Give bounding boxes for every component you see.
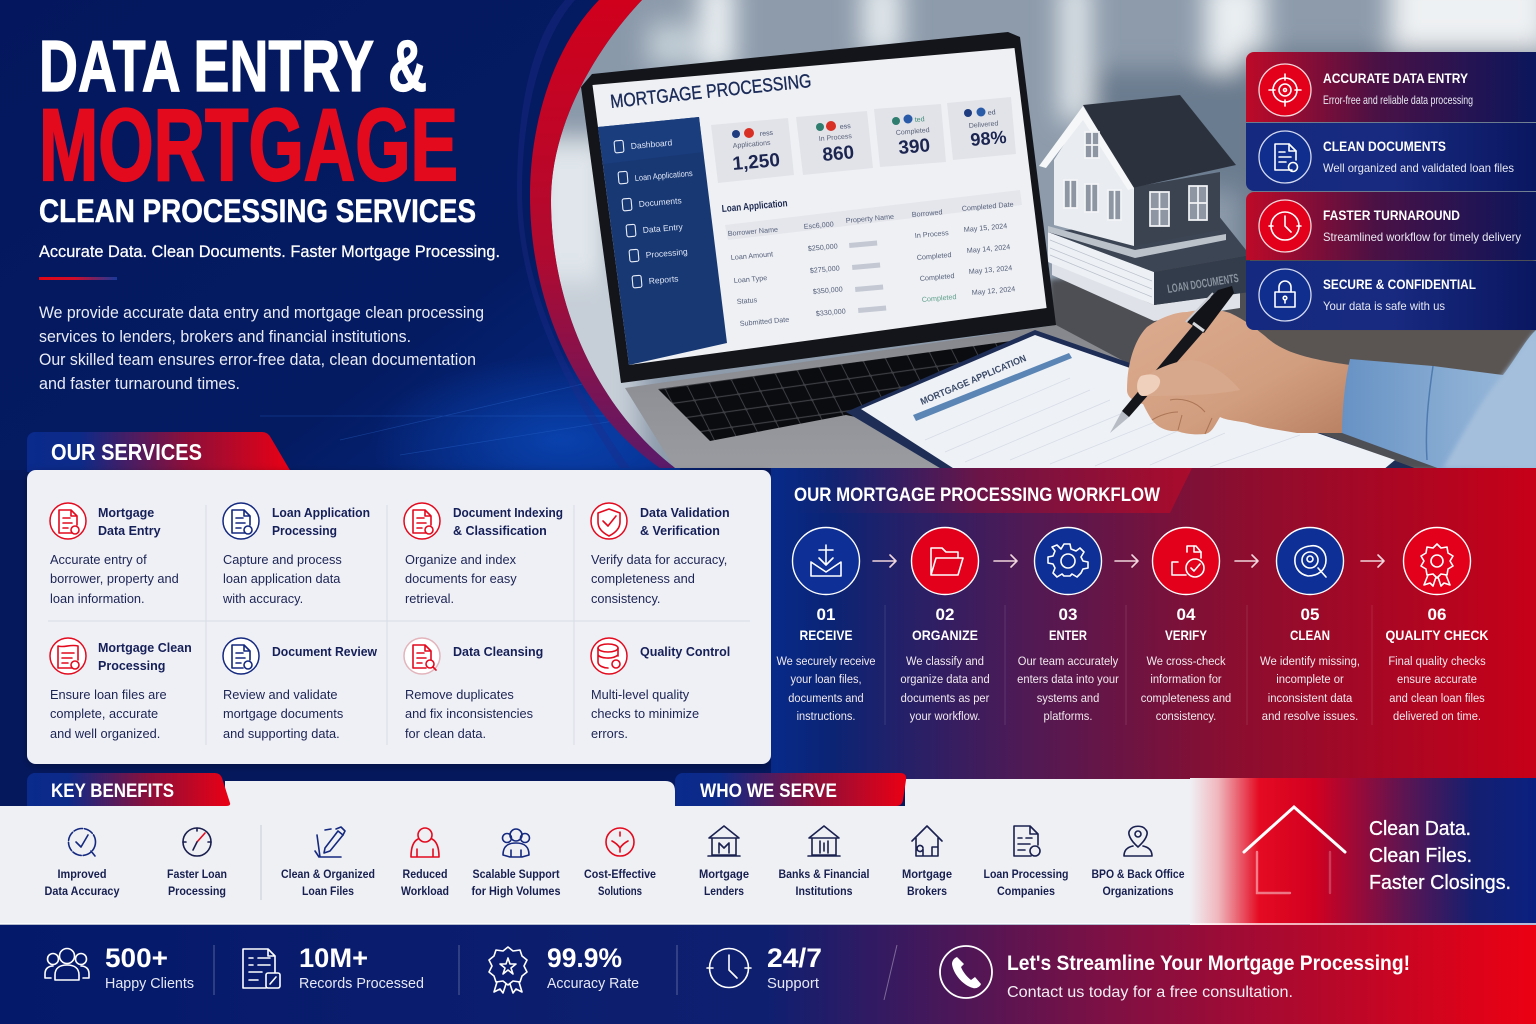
sidebar menu: Dashboard: [630, 137, 673, 151]
light band behind benefits and audience rows: [0, 779, 1200, 924]
step 02 organize: 02: [936, 605, 954, 624]
benefit: scalable support: for High Volumes: [472, 884, 561, 898]
arrow: [873, 555, 896, 567]
stat cards: ed: [988, 109, 996, 117]
banner slogan: Clean Data.: [1369, 818, 1471, 840]
key benefits heading tab: [27, 773, 230, 806]
banner slogan: Faster Closings.: [1369, 872, 1511, 894]
audience: banks: Institutions: [796, 884, 853, 898]
keyboard: [658, 341, 1010, 441]
arrow: [1361, 555, 1384, 567]
sidebar menu: Documents: [638, 195, 682, 209]
book spine text: LOAN DOCUMENTS: [1166, 271, 1240, 296]
title: DATA ENTRY &: [39, 27, 427, 107]
service: quality control: Multi-level quality: [591, 687, 690, 702]
loan application table: Loan Application: [721, 198, 788, 215]
stat: happy clients: [45, 943, 194, 992]
audience: brokers: Mortgage: [902, 867, 952, 881]
accent rule: [39, 277, 117, 280]
benefit: faster loan processing: [167, 828, 227, 898]
card: secure and confidential: Your data is safe with us: [1323, 299, 1445, 313]
hero photo: laptop, house model, hand writing on form: [530, 0, 1536, 480]
call to action: Contact us today for a free consultation.: [1007, 984, 1293, 1001]
audience: mortgage lenders: [699, 826, 749, 898]
services heading tab: [27, 432, 291, 472]
stat cards: ess: [840, 123, 852, 131]
loan application table: Submitted Date: [739, 315, 790, 328]
stat cards: Delivered: [969, 120, 999, 130]
benefit: improved data accuracy: [44, 828, 120, 898]
service: document indexing: Document Indexing: [453, 506, 563, 520]
audience: bpo: [1092, 826, 1185, 898]
benefit: reduced workload: Workload: [401, 884, 449, 898]
service: quality control: errors.: [591, 726, 628, 741]
benefit: cost effective: Solutions: [598, 884, 642, 898]
benefit: clean and organized loan files: Loan Files: [302, 884, 354, 898]
step 06 quality check: Final quality checks: [1388, 656, 1486, 668]
step 06 quality check: ensure accurate: [1397, 674, 1477, 686]
benefit: improved data accuracy: Improved: [58, 867, 106, 881]
icon: phone: [940, 946, 992, 998]
audience: banks: Banks & Financial: [778, 867, 870, 881]
mortgage application form: MORTGAGE APPLICATION: [919, 353, 1028, 408]
stat: records processed: 10M+: [299, 943, 368, 973]
stat cards: Applications: [733, 140, 771, 150]
laptop: [581, 32, 1122, 468]
icon: house outline: [1244, 807, 1345, 893]
service: mortgage clean processing: Ensure loan files are: [50, 687, 167, 702]
footer bar: [0, 923, 1536, 1024]
audience: loan processing companies: Companies: [997, 884, 1055, 898]
card: secure and confidential: SECURE & CONFIDENTIAL: [1323, 277, 1476, 292]
key benefits heading tab: KEY BENEFITS: [51, 780, 174, 802]
panel: mortgage processing workflow: [771, 468, 1536, 779]
step 03 enter: Our team accurately: [1018, 656, 1118, 668]
audience: loan processing companies: Loan Processing: [984, 867, 1068, 881]
step 05 clean: inconsistent data: [1268, 692, 1353, 705]
sidebar menu: Processing: [645, 246, 688, 260]
stat: accuracy rate: 99.9%: [547, 943, 622, 973]
desk: [1050, 250, 1536, 470]
stat cards: In Process: [819, 133, 853, 143]
stat cards: 390: [898, 135, 931, 159]
benefit: clean and organized loan files: Clean & Organized: [281, 867, 375, 881]
stat: support: [707, 943, 822, 992]
service: mortgage data entry: Mortgage: [98, 506, 154, 520]
card: clean documents: CLEAN DOCUMENTS: [1323, 139, 1446, 154]
service: mortgage clean processing: Mortgage Clean: [98, 641, 192, 655]
service: document indexing: Organize and index: [405, 552, 517, 567]
loan application table: [721, 190, 1022, 328]
panel: our services: [27, 470, 771, 764]
service: loan application processing: Loan Application: [272, 506, 370, 520]
sidebar menu: [614, 137, 693, 288]
step 03 enter: ENTER: [1049, 627, 1087, 643]
step 01 receive: [776, 528, 876, 723]
title: [39, 27, 476, 229]
stat: records processed: Records Processed: [299, 975, 424, 992]
loan application table: Status: [736, 295, 758, 306]
card: accurate data entry: [1246, 52, 1536, 122]
loan application table: Borrowed: [911, 207, 943, 219]
step 04 verify: completeness and: [1141, 693, 1231, 705]
benefit: faster loan processing: Processing: [168, 884, 226, 898]
loan application table: May 14, 2024: [966, 242, 1011, 255]
house model: [1039, 95, 1236, 258]
loan application table: Completed: [919, 271, 955, 283]
sidebar menu: Reports: [648, 273, 679, 286]
step 04 verify: 04: [1177, 605, 1196, 624]
audience: bpo: BPO & Back Office: [1092, 867, 1185, 881]
sidebar menu: Loan Applications: [634, 168, 693, 183]
stat: happy clients: Happy Clients: [105, 975, 194, 992]
benefit: cost effective: Cost-Effective: [584, 867, 656, 881]
step 03 enter: [1017, 528, 1119, 723]
service: data validation: completeness and: [591, 571, 695, 586]
step 04 verify: information for: [1150, 674, 1222, 686]
loan application table: Completed: [921, 292, 957, 304]
who we serve row: [699, 826, 1185, 898]
card: secure and confidential: [1246, 261, 1536, 330]
service: mortgage data entry: borrower, property and: [50, 571, 179, 586]
stat cards: ress: [760, 130, 774, 138]
step 03 enter: systems and: [1037, 693, 1099, 705]
card: faster turnaround: Streamlined workflow for timely delivery: [1323, 230, 1521, 244]
screen title: MORTGAGE PROCESSING: [609, 71, 812, 113]
books: LOAN DOCUMENTS: [1048, 215, 1250, 321]
mortgage application form: [846, 330, 1420, 480]
service: loan application processing: Processing: [272, 524, 337, 538]
service: data cleansing: [404, 638, 543, 741]
step 01 receive: RECEIVE: [800, 627, 852, 643]
step 05 clean: 05: [1301, 605, 1319, 624]
loan application table: Esc6,000: [803, 219, 834, 231]
benefit: scalable support: Scalable Support: [472, 867, 560, 881]
benefit: reduced workload: [401, 828, 449, 898]
service: data cleansing: Data Cleansing: [453, 645, 543, 659]
who we serve heading tab: WHO WE SERVE: [700, 780, 837, 802]
loan application table: Completed Date: [961, 199, 1014, 213]
arrow: [994, 555, 1017, 567]
intro paragraph: and faster turnaround times.: [39, 375, 240, 393]
service: quality control: checks to minimize: [591, 706, 699, 721]
loan application table: $275,000: [809, 263, 840, 275]
title: MORTGAGE: [39, 88, 458, 202]
title: CLEAN PROCESSING SERVICES: [39, 193, 476, 229]
who we serve heading tab: [675, 773, 906, 806]
stat cards: 98%: [970, 127, 1007, 150]
service: data cleansing: Remove duplicates: [405, 687, 514, 702]
step 03 enter: enters data into your: [1017, 674, 1119, 686]
benefit: cost effective: [584, 828, 656, 898]
loan application table: $330,000: [815, 306, 846, 318]
hand overlap thumb: [1144, 362, 1240, 396]
step 02 organize: documents as per: [901, 693, 989, 705]
step 01 receive: documents and: [788, 693, 864, 705]
benefit: clean and organized loan files: [281, 827, 375, 898]
loan application table: May 15, 2024: [963, 221, 1008, 234]
step 05 clean: CLEAN: [1290, 627, 1330, 643]
step 01 receive: instructions.: [797, 711, 855, 723]
service: document review: and supporting data.: [223, 726, 340, 741]
intro paragraph: services to lenders, brokers and financial institutions.: [39, 328, 411, 346]
step 06 quality check: and clean loan files: [1389, 693, 1485, 705]
stat: accuracy rate: Accuracy Rate: [547, 975, 639, 992]
audience: loan processing companies: [984, 826, 1068, 898]
audience: banks: [778, 826, 870, 898]
card: faster turnaround: [1246, 192, 1536, 260]
service: mortgage clean processing: [50, 638, 192, 741]
step 04 verify: VERIFY: [1165, 627, 1208, 643]
service: quality control: Quality Control: [640, 645, 730, 659]
step 04 verify: We cross-check: [1146, 656, 1226, 668]
service: document review: Document Review: [272, 645, 377, 659]
audience: brokers: [902, 826, 952, 898]
screen: [592, 48, 1047, 365]
loan application table: $350,000: [812, 284, 843, 296]
card: clean documents: Well organized and validated loan files: [1323, 161, 1514, 175]
service: mortgage data entry: loan information.: [50, 591, 145, 606]
audience: bpo: Organizations: [1102, 884, 1174, 898]
stat: records processed: [243, 943, 424, 992]
feature cards: [1246, 52, 1536, 330]
services heading tab: OUR SERVICES: [51, 439, 202, 465]
step 04 verify: consistency.: [1156, 711, 1216, 723]
step 05 clean: and resolve issues.: [1262, 710, 1358, 723]
stat: support: 24/7: [767, 943, 822, 973]
stat: accuracy rate: [489, 943, 639, 993]
step 02 organize: ORGANIZE: [912, 627, 978, 643]
call to action: Let's Streamline Your Mortgage Processing!: [1007, 952, 1410, 975]
loan application table: Loan Type: [733, 273, 768, 285]
service: document review: mortgage documents: [223, 706, 343, 721]
service: loan application processing: Capture and process: [223, 552, 342, 567]
intro paragraph: [39, 304, 484, 393]
service: mortgage data entry: Data Entry: [98, 524, 161, 538]
step 03 enter: 03: [1059, 605, 1077, 624]
intro paragraph: We provide accurate data entry and mortgage clean processing: [39, 304, 484, 322]
arrow: [1235, 555, 1258, 567]
benefit: faster loan processing: Faster Loan: [167, 867, 227, 881]
service: data validation: [591, 503, 730, 606]
step 03 enter: platforms.: [1044, 711, 1092, 723]
step 06 quality check: [1386, 528, 1488, 723]
stat: support: Support: [767, 975, 820, 992]
stat: happy clients: 500+: [105, 943, 168, 973]
loan application table: In Process: [914, 228, 949, 240]
card: clean documents: [1246, 123, 1536, 191]
service: loan application processing: loan application data: [223, 571, 341, 586]
service: document indexing: [404, 503, 563, 606]
shirt sleeve: [1342, 330, 1536, 470]
service: document review: Review and validate: [223, 687, 338, 702]
step 06 quality check: 06: [1428, 605, 1446, 624]
step 05 clean: We identify missing,: [1260, 655, 1360, 668]
stat cards: [711, 97, 1016, 183]
service: mortgage clean processing: Processing: [98, 659, 165, 673]
hero left background: [0, 0, 750, 525]
service: quality control: [591, 638, 730, 741]
benefit: improved data accuracy: Data Accuracy: [44, 884, 120, 898]
step 01 receive: We securely receive: [776, 656, 876, 668]
workflow heading: OUR MORTGAGE PROCESSING WORKFLOW: [794, 485, 1160, 506]
service: data cleansing: and fix inconsistencies: [405, 706, 533, 721]
service: mortgage clean processing: complete, accurate: [50, 706, 158, 721]
loan application table: May 12, 2024: [971, 284, 1016, 297]
service: data validation: Data Validation: [640, 506, 730, 520]
service: data validation: Verify data for accuracy,: [591, 552, 727, 567]
card: accurate data entry: ACCURATE DATA ENTRY: [1323, 71, 1468, 86]
service: mortgage data entry: Accurate entry of: [50, 552, 147, 567]
service: mortgage clean processing: and well organized.: [50, 726, 160, 741]
step 02 organize: We classify and: [906, 656, 984, 668]
step 05 clean: [1260, 528, 1360, 723]
loan application table: Loan Amount: [730, 249, 773, 262]
hand holding pen: [1110, 286, 1536, 470]
stat cards: Completed: [896, 127, 930, 137]
step 05 clean: incomplete or: [1276, 673, 1344, 686]
service: loan application processing: with accuracy.: [222, 591, 303, 606]
banner slogan: Clean Files.: [1369, 845, 1472, 867]
call to action: [1007, 952, 1410, 1001]
step 02 organize: [900, 528, 990, 723]
service: mortgage data entry: [50, 503, 179, 606]
sidebar: [598, 117, 727, 365]
loan application table: May 13, 2024: [968, 263, 1013, 276]
step 02 organize: organize data and: [900, 674, 990, 686]
panel: clean data banner: [1190, 778, 1536, 925]
audience: brokers: Brokers: [907, 884, 947, 898]
loan application table: $250,000: [807, 241, 838, 253]
bezel: [581, 32, 1056, 383]
service: data cleansing: for clean data.: [405, 726, 486, 741]
benefit: reduced workload: Reduced: [402, 867, 448, 881]
service: data validation: & Verification: [640, 524, 720, 538]
card: faster turnaround: FASTER TURNAROUND: [1323, 208, 1460, 223]
key benefits row: [44, 825, 656, 900]
service: loan application processing: [222, 503, 370, 606]
loan application table: Property Name: [845, 212, 894, 225]
arrow: [1115, 555, 1138, 567]
audience: mortgage lenders: Mortgage: [699, 867, 749, 881]
benefit: scalable support: [472, 829, 561, 898]
service: document indexing: documents for easy: [405, 571, 517, 586]
step 01 receive: your loan files,: [790, 674, 862, 686]
step 04 verify: [1141, 528, 1231, 723]
loan application table: Borrower Name: [727, 225, 778, 238]
stat cards: 1,250: [732, 150, 781, 175]
service: document indexing: & Classification: [453, 524, 547, 538]
hero swoosh: red arc: [517, 0, 675, 468]
step 06 quality check: delivered on time.: [1393, 711, 1481, 723]
service: document review: [223, 638, 377, 741]
step 02 organize: your workflow.: [910, 711, 980, 723]
intro paragraph: Our skilled team ensures error-free data, clean documentation: [39, 351, 476, 369]
laptop base: [625, 325, 1122, 468]
loan application table: Completed: [916, 250, 952, 262]
stat cards: ted: [915, 116, 925, 124]
sidebar menu: Data Entry: [642, 221, 684, 235]
service: data validation: consistency.: [591, 591, 660, 606]
stat cards: 860: [822, 142, 855, 166]
tagline: Accurate Data. Clean Documents. Faster Mortgage Processing.: [39, 242, 500, 261]
card: accurate data entry: Error-free and reliable data processing: [1323, 93, 1473, 107]
pen: [1110, 286, 1234, 433]
banner slogan: [1369, 818, 1511, 894]
photo backdrop: blurred office: [530, 0, 1536, 480]
audience: mortgage lenders: Lenders: [704, 884, 744, 898]
step 01 receive: 01: [817, 605, 835, 624]
service: document indexing: retrieval.: [405, 591, 454, 606]
step 06 quality check: QUALITY CHECK: [1386, 627, 1488, 643]
